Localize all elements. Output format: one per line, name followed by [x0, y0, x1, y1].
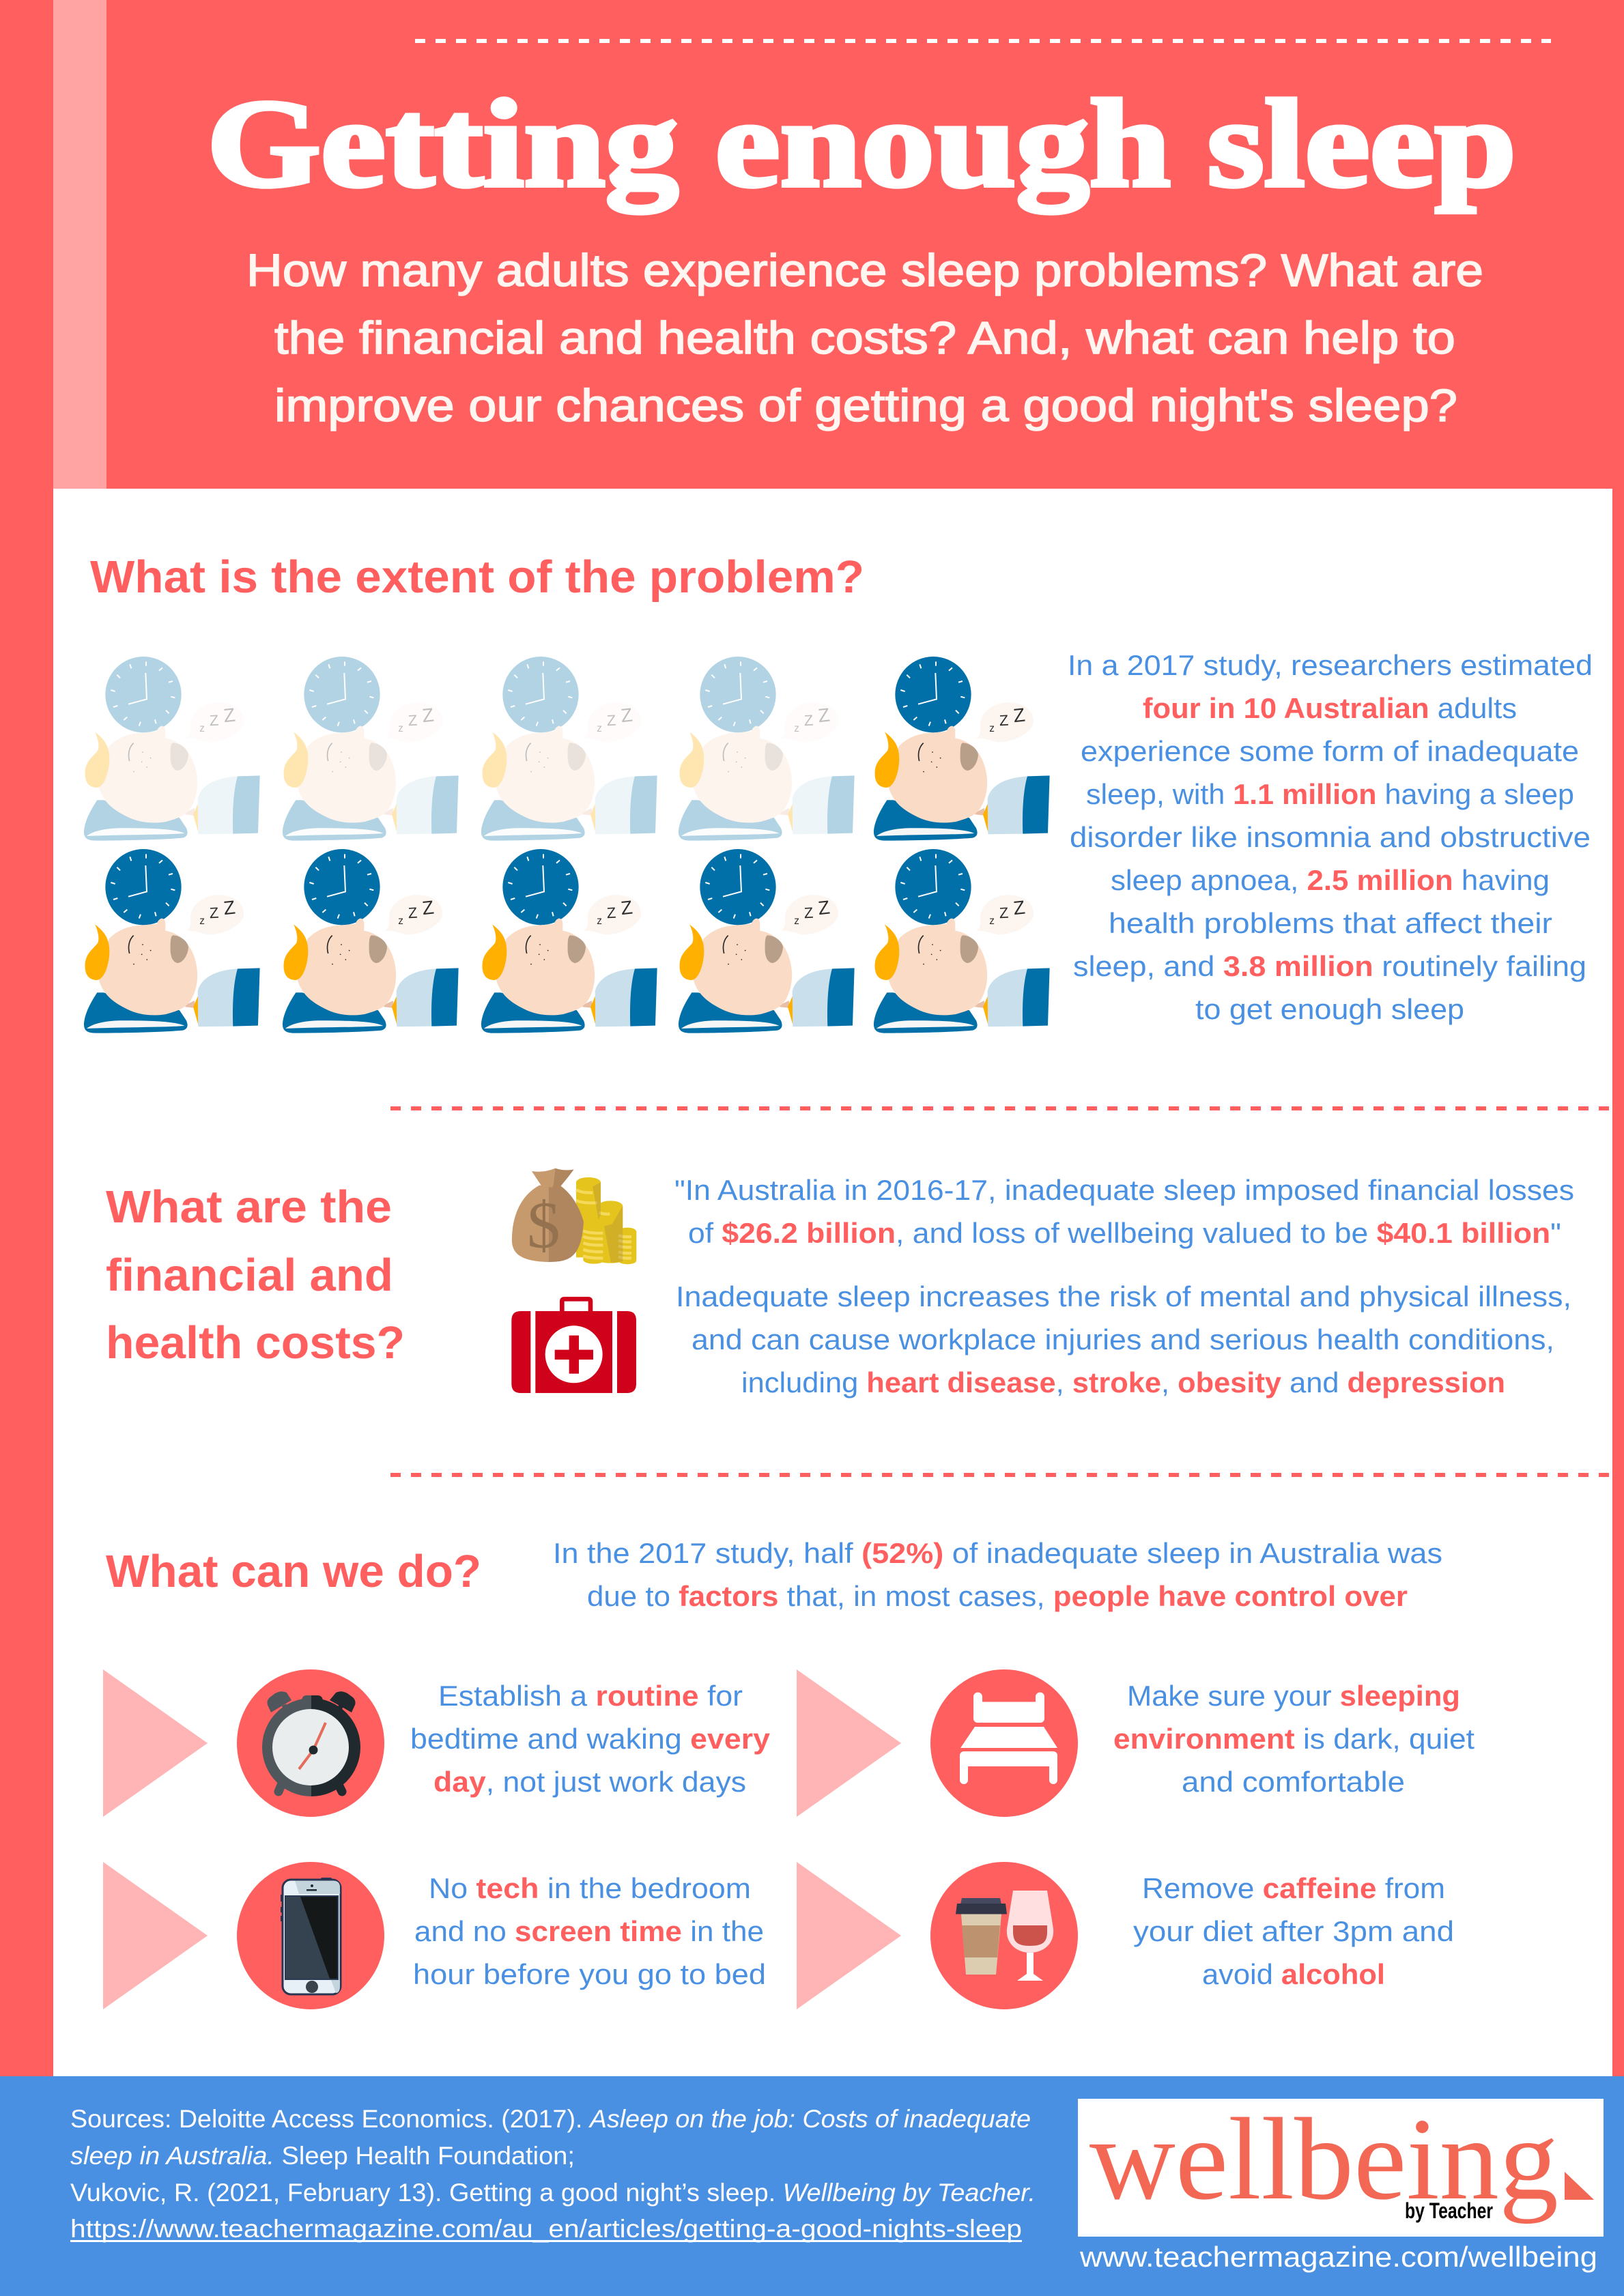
text: 2017 study estimates: sleep, and 3.8 million routinely failing: [1073, 950, 1586, 982]
panel: financial and health costs: [106, 1168, 1574, 1398]
subtitle: improve our chances of getting a good night's sleep?: [274, 380, 1457, 431]
text: caffeine and alcohol: Remove caffeine from: [1142, 1872, 1445, 1904]
header accent stripe: [53, 0, 106, 489]
subtitle: How many adults experience sleep problems? What are: [246, 245, 1483, 296]
text: caffeine and alcohol: [1133, 1872, 1454, 1990]
text: routine: day, not just work days: [433, 1766, 746, 1798]
icon: money bag and coins: $: [527, 1188, 560, 1262]
text: website url: www.teachermagazine.com/wellbeing: [1079, 2241, 1597, 2273]
text: financial losses quote: [674, 1174, 1574, 1249]
subtitle: the financial and health costs? And, what can help to: [274, 313, 1455, 364]
text: health risks: and can cause workplace injuries and serious health conditions,: [692, 1323, 1554, 1355]
text: health risks: [676, 1280, 1571, 1398]
text: 2017 study estimates: sleep apnoea, 2.5 million having: [1111, 864, 1550, 896]
icon: money bag and coins: [512, 1168, 636, 1264]
text: 2017 study estimates: In a 2017 study, researchers estimated: [1068, 649, 1593, 681]
text: sleeping environment: and comfortable: [1182, 1766, 1405, 1798]
icon: coffee and wine: [930, 1862, 1078, 2009]
heading: financial and health costs: What are the: [106, 1181, 392, 1233]
text: 2017 study estimates: experience some form of inadequate: [1081, 735, 1579, 767]
text: caffeine and alcohol: your diet after 3pm and: [1133, 1915, 1454, 1947]
text: no tech: hour before you go to bed: [413, 1958, 766, 1990]
title: Getting enough sleep: [207, 74, 1516, 214]
heading: financial and health costs: financial and: [106, 1250, 393, 1301]
panel: what can we do: [103, 1537, 1475, 2009]
icon: smartphone: [237, 1862, 384, 2009]
logo: wellbeing by Teacher: wellbeing: [1089, 2095, 1558, 2224]
text: health risks: Inadequate sleep increases the risk of mental and physical illness,: [676, 1280, 1571, 1312]
text: routine: Establish a routine for: [438, 1680, 743, 1712]
icon: first aid kit: [511, 1299, 636, 1393]
text: caffeine and alcohol: avoid alcohol: [1202, 1958, 1385, 1990]
text: sources: Sources: Deloitte Access Economics. (2017). Asleep on the job: Costs of inadequate: [70, 2105, 1031, 2133]
arrow: [797, 1862, 901, 2009]
text: sources: Vukovic, R. (2021, February 13). Getting a good night’s sleep. Wellbeing by Teacher.: [70, 2179, 1036, 2207]
panel: white content area: [53, 489, 1612, 2076]
text: half of inadequate sleep: [553, 1537, 1442, 1612]
icon: bed: [930, 1669, 1078, 1817]
text: routine: [410, 1680, 771, 1798]
logo: wellbeing by Teacher: by Teacher: [1405, 2198, 1493, 2223]
text: health risks: including heart disease, stroke, obesity and depression: [741, 1366, 1505, 1398]
heading: financial and health costs: [106, 1181, 405, 1368]
arrow: [103, 1862, 208, 2009]
panel: extent of the problem: [84, 551, 1593, 1033]
text: 2017 study estimates: to get enough sleep: [1195, 993, 1464, 1025]
text: no tech: No tech in the bedroom: [429, 1872, 751, 1904]
tip: sleeping environment: [797, 1669, 1475, 1817]
text: sources: sleep in Australia. Sleep Health Foundation;: [70, 2142, 575, 2170]
text: financial losses quote: of $26.2 billion , and loss of wellbeing valued to be $40.1 billion ": [688, 1217, 1561, 1249]
heading: financial and health costs: health costs?: [106, 1317, 405, 1368]
arrow: [797, 1669, 901, 1817]
tip: caffeine and alcohol: [797, 1862, 1454, 2009]
text: 2017 study estimates: disorder like insomnia and obstructive: [1070, 821, 1591, 853]
heading: extent of the problem: What is the extent of the problem?: [90, 551, 864, 603]
text: sleeping environment: [1113, 1680, 1475, 1798]
icon: alarm clock: [237, 1669, 384, 1817]
pictogram: four in ten adults: [84, 657, 1050, 1033]
text: 2017 study estimates: four in 10 Australian adults: [1143, 692, 1517, 724]
text: half of inadequate sleep: due to factors that, in most cases, people have control over: [587, 1580, 1408, 1612]
subtitle: [246, 245, 1483, 431]
text: half of inadequate sleep: In the 2017 study, half (52%) of inadequate sleep in Australia was: [553, 1537, 1442, 1569]
text: no tech: and no screen time in the: [414, 1915, 764, 1947]
text: 2017 study estimates: [1068, 649, 1593, 1025]
heading: what can we do: What can we do?: [106, 1546, 481, 1597]
tip: no tech: [103, 1862, 766, 2009]
text: sleeping environment: environment is dark, quiet: [1113, 1723, 1475, 1755]
text: no tech: [413, 1872, 766, 1990]
text: sleeping environment: Make sure your sleeping: [1127, 1680, 1460, 1712]
arrow: [103, 1669, 208, 1817]
text: 2017 study estimates: sleep, with 1.1 million having a sleep: [1086, 778, 1574, 810]
text: routine: bedtime and waking every: [410, 1723, 771, 1755]
text: sources: https://www.teachermagazine.com/au_en/articles/getting-a-good-nights-sleep: [70, 2215, 1022, 2243]
text: 2017 study estimates: health problems that affect their: [1109, 907, 1552, 939]
panel: header: [53, 0, 1551, 489]
tip: routine: [103, 1669, 771, 1817]
panel: footer: [0, 2076, 1624, 2296]
text: financial losses quote: "In Australia in 2016-17, inadequate sleep imposed financial losses: [674, 1174, 1574, 1206]
text: sources: [70, 2105, 1036, 2243]
